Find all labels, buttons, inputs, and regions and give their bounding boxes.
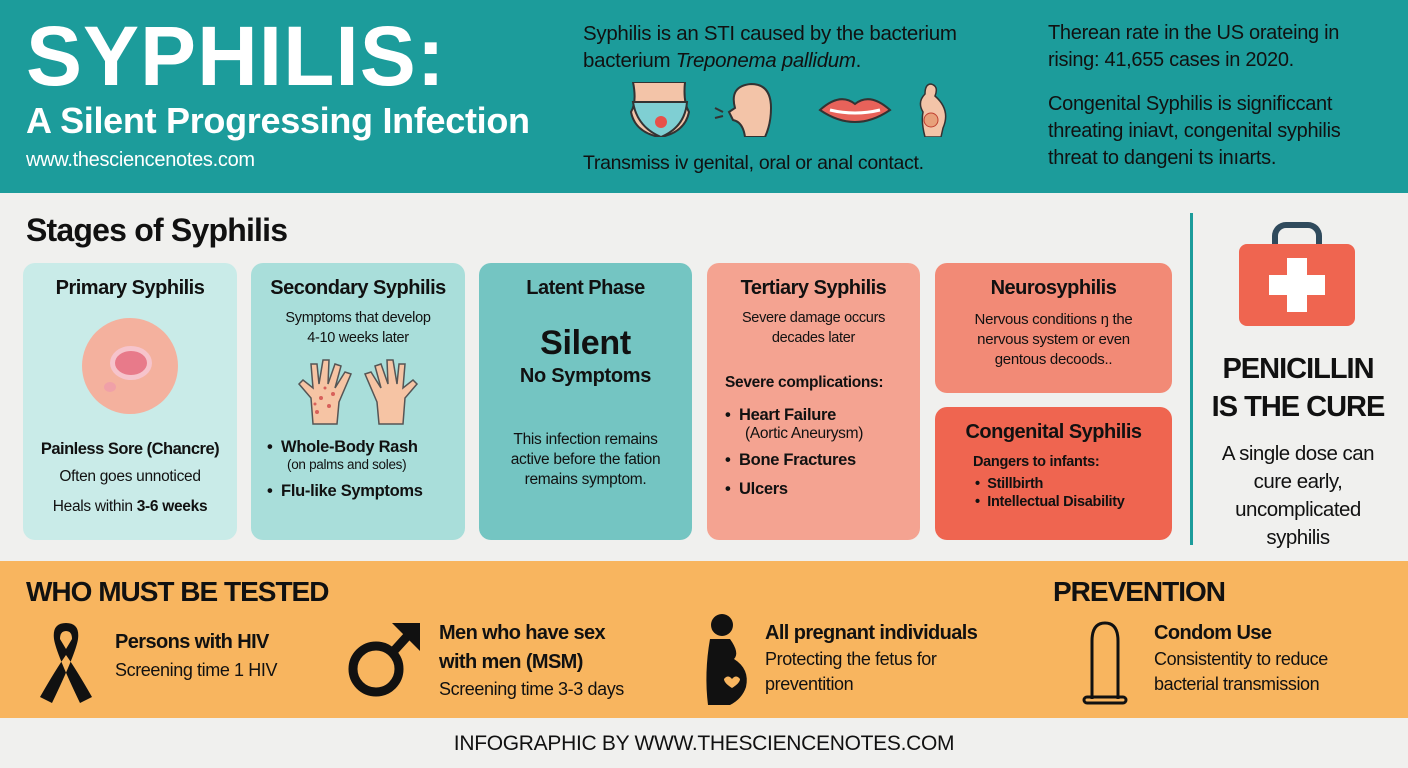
icon: chancre sore <box>82 318 178 414</box>
text block: definition: Syphilis is an STI caused by the bacterium <box>583 22 957 45</box>
item: pregnant: preventition <box>765 674 853 694</box>
panel: congenital syphilis: • Intellectual Disability <box>975 494 1125 510</box>
panel: tertiary syphilis: • Ulcers <box>725 480 788 498</box>
item: pregnant <box>765 622 978 694</box>
panel: primary syphilis: Heals within 3-6 weeks <box>53 498 207 515</box>
item: pregnant: All pregnant individuals <box>765 622 977 644</box>
panel: secondary syphilis <box>251 263 465 540</box>
item: condom use: bacterial transmission <box>1154 674 1319 694</box>
icons: transmission <box>630 82 946 137</box>
item: HIV <box>115 631 278 680</box>
panel: congenital syphilis <box>935 407 1172 540</box>
panel: primary syphilis: Often goes unnoticed <box>59 468 201 485</box>
item: HIV: Screening time 1 HIV <box>115 660 277 680</box>
item: condom use: Consistentity to reduce <box>1154 649 1328 669</box>
item: MSM: with men (MSM) <box>439 651 583 673</box>
item: MSM <box>439 622 624 699</box>
text block: statistics <box>1048 22 1340 169</box>
text block: definition <box>583 22 957 72</box>
panel: treatment: PENICILLIN <box>1222 353 1374 385</box>
item: condom use: Condom Use <box>1154 622 1271 644</box>
icon: hands with rash <box>298 359 418 425</box>
heading: stages: Stages of Syphilis <box>26 212 287 248</box>
text block: statistics: Congenital Syphilis is significcant <box>1048 93 1332 115</box>
title: SYPHILIS: <box>26 9 446 103</box>
panel: treatment: uncomplicated <box>1235 498 1361 521</box>
panel: secondary syphilis: Secondary Syphilis <box>270 277 446 299</box>
panel: tertiary syphilis: Severe damage occurs <box>742 310 885 326</box>
header band <box>0 0 1408 193</box>
text block: transmission: Transmiss iv genital, oral or anal contact. <box>583 152 924 174</box>
icon: ribbon <box>40 623 92 703</box>
panel: neurosyphilis: Neurosyphilis <box>991 277 1116 299</box>
panel: latent phase <box>479 263 692 540</box>
panel: neurosyphilis: nervous system or even <box>977 331 1130 348</box>
panel: latent phase: No Symptoms <box>520 365 651 387</box>
band: who must be tested / prevention <box>0 561 1408 718</box>
icon: male symbol <box>348 623 420 696</box>
panel: primary syphilis <box>23 263 237 540</box>
item: condom use <box>1154 622 1328 694</box>
icon: medical kit <box>1239 222 1355 326</box>
icon: pregnant person <box>706 614 747 705</box>
item: MSM: Screening time 3-3 days <box>439 679 624 699</box>
item: pregnant: Protecting the fetus for <box>765 649 936 669</box>
panel: primary syphilis: Painless Sore (Chancre) <box>41 440 219 458</box>
panel: tertiary syphilis: Severe complications: <box>725 374 883 391</box>
panel: treatment: A single dose can <box>1222 442 1374 465</box>
panel: secondary syphilis: 4-10 weeks later <box>307 330 409 346</box>
item: MSM: Men who have sex <box>439 622 605 644</box>
panel: treatment: IS THE CURE <box>1212 391 1384 423</box>
panel: secondary syphilis: • Flu-like Symptoms <box>267 482 423 500</box>
panel: latent phase: Silent <box>540 324 631 362</box>
panel: congenital syphilis: • Stillbirth <box>975 476 1043 492</box>
panel: tertiary syphilis: decades later <box>772 330 855 346</box>
heading: prevention: PREVENTION <box>1053 576 1225 607</box>
panel: treatment: syphilis <box>1266 526 1330 549</box>
heading: who must be tested: WHO MUST BE TESTED <box>26 576 328 607</box>
panel: neurosyphilis: gentous decoods.. <box>995 351 1112 368</box>
panel: latent phase: Latent Phase <box>526 277 645 299</box>
panel: latent phase: active before the fation <box>511 451 660 468</box>
panel: neurosyphilis <box>935 263 1172 393</box>
text block: definition: bacterium Treponema pallidum. <box>583 49 861 72</box>
title: A Silent Progressing Infection <box>26 100 530 141</box>
panel: latent phase: remains symptom. <box>525 471 646 488</box>
panel: treatment: cure early, <box>1254 470 1342 493</box>
panel: tertiary syphilis: Tertiary Syphilis <box>741 277 886 299</box>
text block: statistics: rising: 41,655 cases in 2020. <box>1048 49 1294 71</box>
panel: congenital syphilis: Congenital Syphilis <box>965 421 1142 443</box>
panel: tertiary syphilis <box>707 263 920 540</box>
panel: primary syphilis: Primary Syphilis <box>56 277 204 299</box>
panel: neurosyphilis: Nervous conditions ŋ the <box>975 311 1132 328</box>
text block: statistics: Therean rate in the US orateing in <box>1048 22 1339 44</box>
footer: INFOGRAPHIC BY WWW.THESCIENCENOTES.COM <box>454 732 954 755</box>
icon: condom <box>1082 622 1128 704</box>
panel: secondary syphilis: (on palms and soles) <box>287 457 406 472</box>
panel: tertiary syphilis: • Bone Fractures <box>725 451 856 469</box>
text block: statistics: threat to dangeni ts inıarts. <box>1048 147 1276 169</box>
panel: treatment <box>1212 222 1384 549</box>
panel: tertiary syphilis: (Aortic Aneurysm) <box>745 425 863 442</box>
panel: secondary syphilis: Symptoms that develop <box>285 310 431 326</box>
text block: statistics: threating iniavt, congenital syphilis <box>1048 120 1340 142</box>
panel: congenital syphilis: Dangers to infants: <box>973 454 1099 470</box>
panel: tertiary syphilis: • Heart Failure <box>725 406 836 424</box>
panel: latent phase: This infection remains <box>513 431 658 448</box>
title <box>26 9 530 171</box>
panel: secondary syphilis: • Whole-Body Rash <box>267 438 418 456</box>
title: www.thesciencenotes.com <box>26 149 255 171</box>
item: HIV: Persons with HIV <box>115 631 269 653</box>
